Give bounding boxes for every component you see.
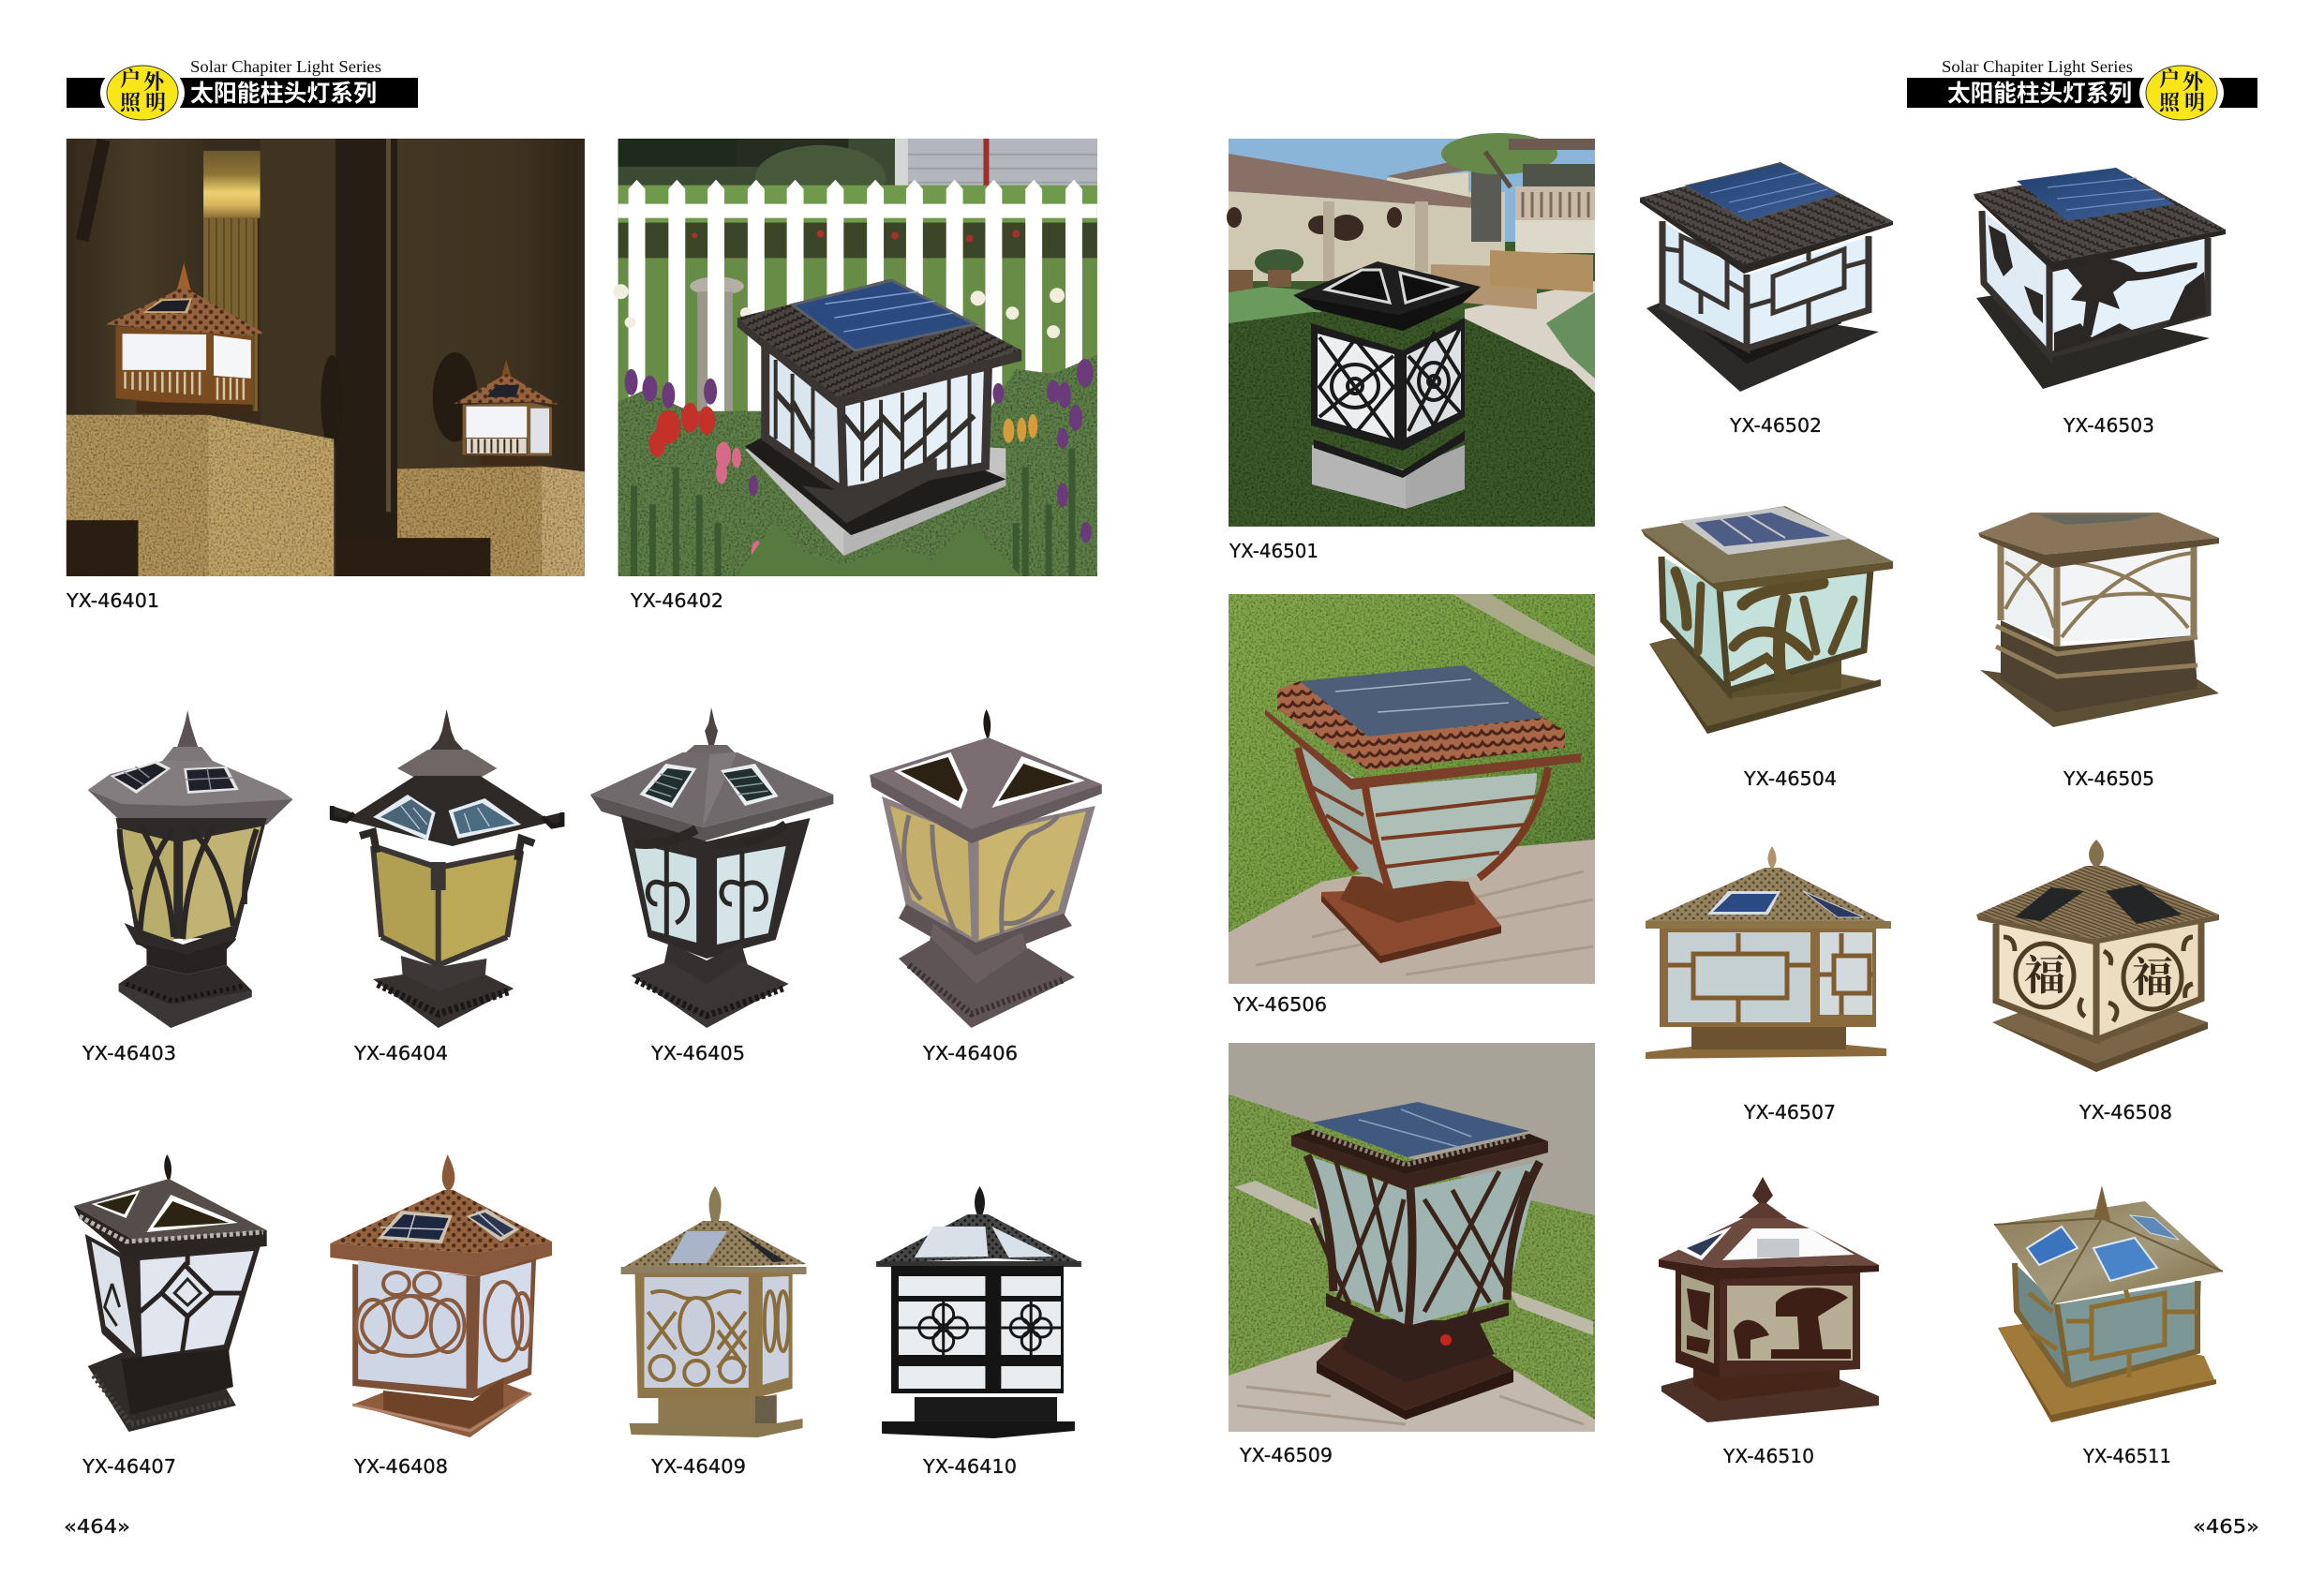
lantern: YX-46407	[74, 1154, 267, 1432]
header: right page: 太阳能柱头灯系列	[1947, 81, 2132, 107]
header: right page: 照	[2159, 87, 2182, 116]
foliage and tulips	[614, 284, 1097, 576]
front grass over stone	[737, 523, 1020, 576]
header: right page: 户	[2159, 64, 2180, 93]
header: right page: 明	[2184, 87, 2205, 116]
birdbath	[690, 276, 744, 413]
labels: row 2	[82, 1455, 1017, 1478]
lantern: YX-46408	[330, 1154, 552, 1437]
lantern: YX-46508: 福	[2132, 944, 2173, 1004]
header: left page	[67, 57, 418, 125]
labels: row 1	[82, 1042, 1018, 1064]
labels: row 1: YX-46403	[82, 1042, 176, 1064]
labels: 46504 46505: YX-46505	[2063, 767, 2154, 790]
header: left page: 太阳能柱头灯系列	[190, 81, 377, 107]
label: YX-46401	[66, 589, 159, 612]
labels: 46504 46505: YX-46504	[1743, 767, 1837, 790]
big lantern in photo	[106, 262, 265, 415]
white picket fence	[618, 180, 1097, 421]
labels: row 1: YX-46406	[922, 1042, 1018, 1064]
labels: 46502 46503	[1729, 414, 2154, 437]
labels: 46507 46508: YX-46508	[2078, 1101, 2172, 1123]
lantern: YX-46405	[590, 707, 833, 1028]
lantern: YX-46403	[88, 710, 293, 1028]
labels: 46504 46505	[1743, 767, 2154, 790]
photo: YX-46506 copper lantern on lawn	[1229, 594, 1595, 984]
labels: 46510 46511	[1722, 1445, 2171, 1467]
lantern: YX-46502	[1640, 162, 1893, 392]
lantern: YX-46504	[1641, 506, 1893, 734]
photo: YX-46401 lit lanterns on stone pillars	[67, 139, 585, 576]
labels: row 2: YX-46410	[922, 1455, 1017, 1478]
photo: YX-46509 lattice lantern	[1229, 1043, 1595, 1432]
labels: 46502 46503: YX-46503	[2063, 414, 2154, 437]
lantern: YX-46511	[1994, 1185, 2223, 1422]
lantern: YX-46404	[332, 709, 562, 1028]
small lantern in photo	[454, 360, 559, 465]
photo: YX-46402 garden with white fence	[614, 139, 1097, 576]
header: left page: 明	[145, 87, 166, 116]
label: YX-46509	[1239, 1444, 1333, 1466]
header: left page: 外	[143, 67, 166, 96]
lantern: YX-46505	[1978, 513, 2219, 727]
label: YX-46402	[630, 589, 723, 612]
labels: 46510 46511: YX-46511	[2082, 1445, 2171, 1467]
label: YX-46506	[1232, 993, 1327, 1016]
lantern in photo	[1291, 1102, 1548, 1420]
label: YX-46501	[1229, 540, 1318, 562]
lantern: YX-46510	[1659, 1177, 1879, 1422]
header: left page: 户	[120, 64, 141, 93]
labels: row 2: YX-46407	[82, 1455, 176, 1478]
header: left page: Solar Chapiter Light Series	[190, 57, 381, 76]
labels: 46507 46508	[1743, 1101, 2172, 1123]
lantern: YX-46503	[1974, 168, 2226, 389]
header: left page: 照	[120, 87, 142, 116]
labels: 46510 46511: YX-46510	[1722, 1445, 1814, 1467]
page number right: «465»	[2193, 1515, 2259, 1538]
labels: 46502 46503: YX-46502	[1729, 414, 1822, 437]
lantern in photo	[737, 279, 1021, 556]
header: right page: 外	[2182, 67, 2205, 96]
lantern: YX-46508	[1976, 840, 2219, 1072]
lantern: YX-46507	[1646, 846, 1891, 1059]
lantern in photo	[1293, 261, 1481, 509]
labels: row 1: YX-46404	[353, 1042, 448, 1064]
lantern: YX-46409	[621, 1186, 807, 1437]
page number left: «464»	[64, 1515, 130, 1538]
lantern: YX-46406	[870, 709, 1102, 1028]
header: right page: Solar Chapiter Light Series	[1942, 57, 2133, 76]
lantern in photo	[1265, 665, 1581, 963]
labels: 46507 46508: YX-46507	[1743, 1101, 1836, 1123]
lantern: YX-46508: 福	[2024, 942, 2065, 1002]
labels: row 1: YX-46405	[650, 1042, 745, 1064]
lantern: YX-46410	[875, 1186, 1081, 1438]
labels: row 2: YX-46408	[353, 1455, 448, 1478]
header: right page	[1907, 57, 2257, 125]
labels: row 2: YX-46409	[650, 1455, 746, 1478]
photo: YX-46501 patio lawn	[1227, 133, 1595, 527]
